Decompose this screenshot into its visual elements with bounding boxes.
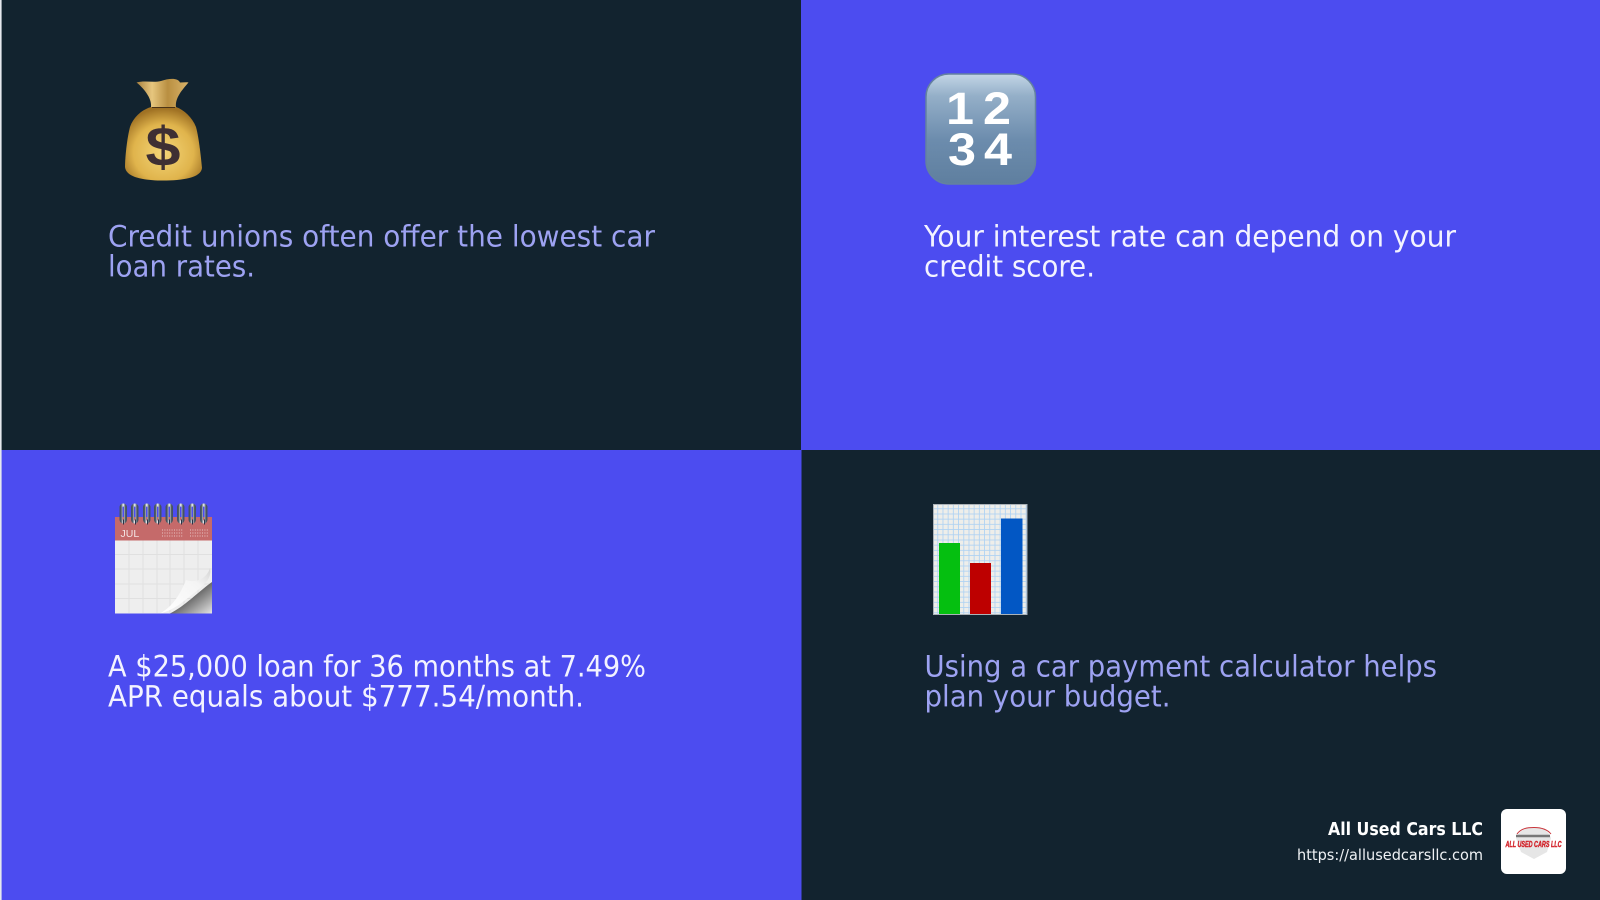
background panel: loan payment fact (0, 450, 802, 900)
page curl (170, 582, 212, 614)
background panel: calculator fact (802, 450, 1600, 900)
icon: input numbers keycap: 4 (984, 124, 1012, 175)
calendar page (115, 540, 212, 614)
background panel: credit score fact (801, 0, 1600, 450)
icon: input numbers keycap (926, 74, 1036, 184)
logo card: ALL USED CARS LLC (1505, 839, 1562, 849)
logo card (1501, 809, 1566, 874)
text: payment calculator: plan your budget. (924, 680, 1170, 714)
text: loan example: A $25,000 loan for 36 months at 7.49% (108, 650, 646, 684)
icon: input numbers keycap: 2 (983, 83, 1011, 134)
text: credit score (923, 220, 1457, 284)
icon: money bag: $ (146, 115, 180, 178)
icon: input numbers keycap: 1 (946, 83, 974, 134)
text: credit unions: loan rates. (108, 250, 255, 284)
brand url: https://allusedcarsllc.com (1297, 846, 1483, 864)
text: credit unions (108, 220, 656, 284)
brand name: All Used Cars LLC (1328, 820, 1483, 840)
icon: bar chart (934, 504, 1027, 614)
text: credit score: Your interest rate can depend on your (923, 220, 1457, 254)
icon: money bag (125, 79, 202, 180)
text: loan example (108, 650, 646, 714)
icon: spiral calendar (115, 505, 212, 614)
text: credit score: credit score. (924, 250, 1095, 284)
background panel: money bag fact (0, 0, 801, 450)
text: payment calculator: Using a car payment calculator helps (924, 650, 1437, 684)
icon: input numbers keycap: 3 (948, 124, 976, 175)
calendar header (115, 517, 212, 540)
text: loan example: APR equals about $777.54/month. (108, 680, 584, 714)
left edge strip (0, 0, 2, 900)
binding rings (121, 505, 206, 522)
icon: spiral calendar: JUL (120, 528, 139, 540)
text: credit unions: Credit unions often offer the lowest car (108, 220, 656, 254)
text: payment calculator (924, 650, 1437, 714)
